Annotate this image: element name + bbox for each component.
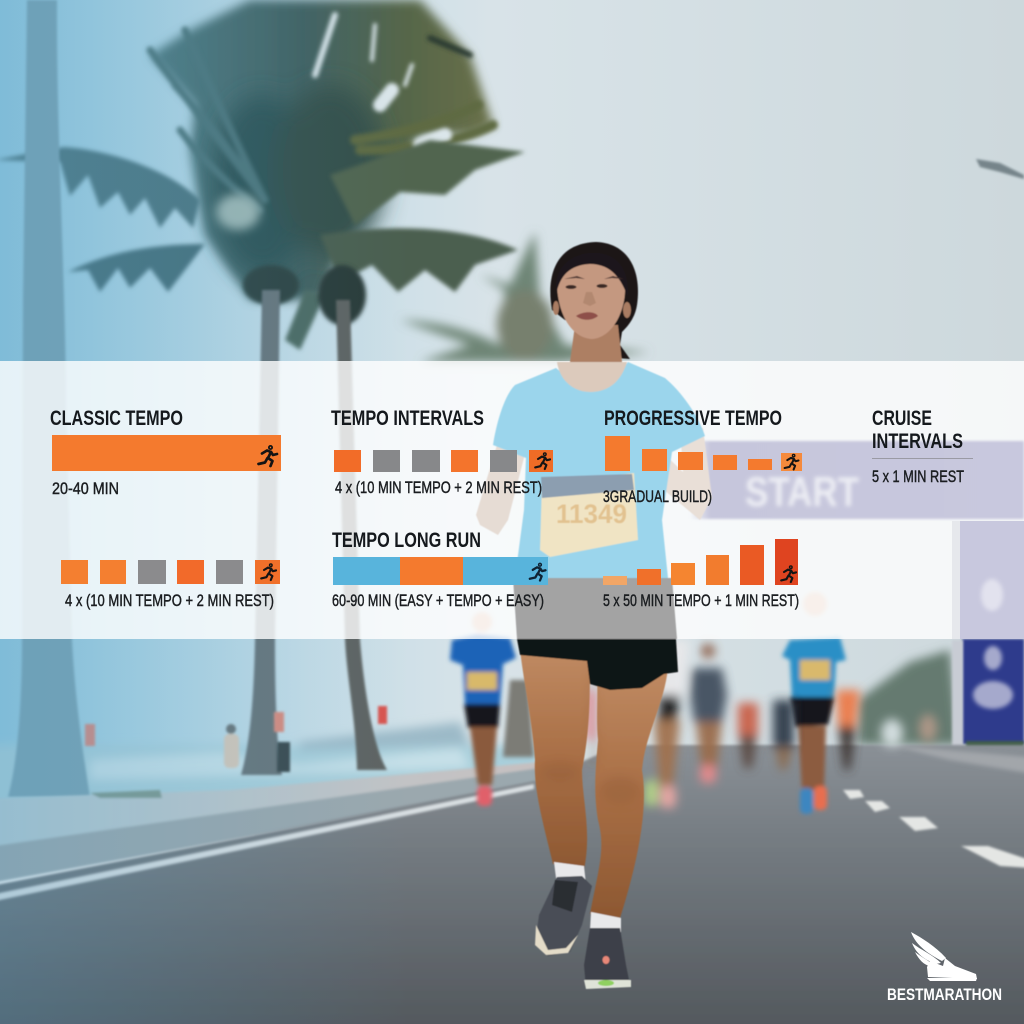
far palm crown [400,232,650,362]
icon: runner [785,454,798,470]
fringe [556,253,628,298]
heading: classic tempo: CLASSIC TEMPO [50,407,183,430]
sidewalk and curb [0,762,540,885]
palm fronds left lower [68,244,205,292]
shorts seen through band [513,578,677,639]
tall left trunk [8,0,90,797]
panel: interval blocks lower left [61,560,280,610]
rest label: 5 x 1 MIN REST [872,467,964,486]
knee shading [540,660,640,804]
far kerb on right [890,745,1024,775]
neck [570,325,622,362]
roadside flags and spectator [85,706,387,772]
olive frond tips top right [355,38,493,150]
panel: tempo long run [332,529,548,610]
front shoe [535,876,592,956]
easy tempo easy bar [333,557,548,585]
front leg [520,650,590,870]
sponsor pillar [952,639,1024,760]
nose [583,292,596,306]
socks [554,862,621,932]
translucent white band [0,361,1024,639]
dark palm core [212,85,385,275]
pillar in band [952,521,1024,639]
sky [0,0,1024,800]
icon: winged shoe [911,932,977,981]
long run label: 60-90 MIN (EASY + TEMPO + EASY) [332,591,544,610]
divider [872,458,973,459]
mouth [576,312,598,320]
rear shoe [584,928,631,989]
panel: cruise intervals [872,407,973,486]
left arm [476,445,526,535]
distant treeline [858,650,960,745]
interval squares [61,560,280,584]
duration label: 20-40 MIN [52,479,119,498]
banner text: START [745,468,859,515]
rear leg [590,668,668,918]
build label: 3GRADUAL BUILD) [603,487,712,506]
panel: tempo intervals [331,407,553,497]
icon: runner [261,564,276,580]
shirt [493,362,705,578]
solid tempo bar [52,435,281,471]
palm crown strands [150,30,265,210]
interval label: 4 x (10 MIN TEMPO + 2 MIN REST) [335,478,542,497]
ponytail and hair [550,242,638,359]
bib number: 11349 [556,499,627,529]
heading: tempo intervals: TEMPO INTERVALS [331,407,484,430]
pale coconut cluster [216,194,260,230]
race bib [540,473,638,557]
interval squares [334,450,553,472]
panel: progressive tempo [603,407,802,506]
palm fronds left upper [0,147,200,228]
heading: progressive tempo: PROGRESSIVE TEMPO [604,407,782,430]
start gantry banner [690,441,1024,639]
crown base [243,265,366,325]
icon: runner [535,453,550,469]
ascending bars [603,539,798,585]
right arm [632,425,712,520]
cruise label: 5 x 50 MIN TEMPO + 1 MIN REST) [603,591,799,610]
panel: classic tempo [50,407,281,498]
ears [553,301,631,318]
neckline skin [557,362,627,392]
sea and distant headland [0,722,540,805]
icon: runner [258,446,277,466]
icon: runner [530,563,546,580]
road edge line [0,784,534,902]
main runner [476,242,712,989]
palm fronds right [285,140,525,350]
heading: cruise intervals: CRUISE [872,407,932,430]
black shorts [517,639,678,690]
road surface [0,745,1024,1024]
background runner: light blue shirt [782,592,846,814]
street lamp [976,159,1024,179]
distant trunk [503,680,534,757]
slanted trunk [336,300,387,770]
sky gaps in crown [315,15,445,145]
logo: bestmarathon [887,932,1002,1004]
palm trees [0,0,650,797]
icon: runner [781,566,796,582]
descending bars [605,436,802,471]
interval label: 4 x (10 MIN TEMPO + 2 MIN REST) [65,591,274,610]
centre trunk [241,290,282,775]
road centre dashes [843,790,1024,868]
panel: cruise intervals ascending bars [603,539,799,610]
background crowd of runners [584,640,937,808]
heading: tempo long run: TEMPO LONG RUN [332,529,481,552]
palm crown mass [150,0,493,300]
face [557,256,625,339]
heading: cruise intervals: INTERVALS [872,430,963,453]
background runner: blue shirt [450,612,516,806]
eyes and brows [564,276,624,289]
